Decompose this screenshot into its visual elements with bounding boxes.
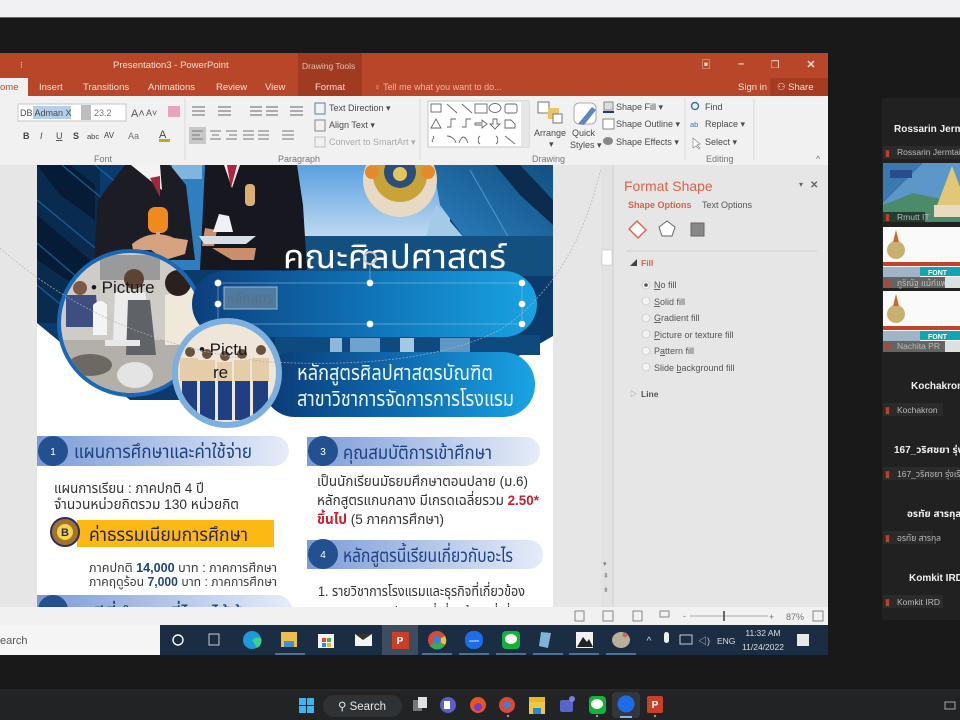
font group: Aa <box>128 131 139 141</box>
font group: 23.2 <box>94 108 112 118</box>
editing group <box>690 98 821 164</box>
ribbon tabs <box>0 78 828 96</box>
fill options: Picture or texture fill <box>654 330 734 340</box>
format shape pane: Shape Options <box>628 200 692 210</box>
format shape pane <box>613 165 828 607</box>
tuition fees: ภาคฤดูร้อน 7,000 บาท : ภาคการศึกษา <box>89 575 277 589</box>
section 4 heading: 4 <box>320 550 326 561</box>
participant: Komkit: ▮ <box>885 597 890 607</box>
windows 10 taskbar: ENG <box>717 636 735 646</box>
university seal <box>363 165 437 217</box>
study plan text <box>54 482 238 509</box>
PowerPoint title bar: ❐ <box>771 60 780 71</box>
ribbon tabs: Format <box>315 82 345 93</box>
font group: A˅ <box>146 108 157 118</box>
participant: Nachita PR <box>883 291 960 352</box>
ribbon tabs: Review <box>216 82 247 93</box>
section 3 heading: คุณสมบัติการเข้าศึกษา <box>343 441 492 464</box>
font group: A <box>159 129 167 141</box>
format shape pane: Format Shape <box>624 178 713 194</box>
format shape pane: Fill <box>641 258 653 268</box>
drawing group: Shape Outline ▾ <box>616 119 681 129</box>
windows 10 search box: earch <box>0 635 28 647</box>
participant: Kochakron: ▮ <box>885 405 890 415</box>
course list: 1. รายวิชาการโรงแรมและธุรกิจที่เกี่ยวข้อง <box>318 581 525 600</box>
drawing group: Styles ▾ <box>570 140 602 150</box>
format shape pane: Text Options <box>702 200 753 210</box>
ribbon tabs: Animations <box>148 82 195 93</box>
ribbon <box>0 96 828 165</box>
participant: Nachita PR: Nachita PR <box>897 341 940 351</box>
course list <box>318 582 524 607</box>
windows 10 taskbar: P <box>397 636 404 647</box>
PowerPoint title bar: Drawing Tools <box>302 61 355 71</box>
course name pill <box>192 271 537 337</box>
participant: Rmutt IT: ▮ <box>885 212 890 222</box>
fill options: Slide background fill <box>654 363 735 373</box>
participant: Rossarin: ▮ <box>885 148 890 158</box>
faculty title: คณะศิลปศาสตร์ <box>283 238 508 275</box>
PowerPoint title bar: Presentation3 - PowerPoint <box>113 60 229 71</box>
entry requirements text: เป็นนักเรียนมัธยมศึกษาตอนปลาย (ม.6) <box>317 473 528 489</box>
participant: ภูริณัฐ: ▮ <box>885 278 890 288</box>
font group: S <box>73 131 79 141</box>
status bar <box>0 607 828 625</box>
participant: Rossarin <box>883 124 960 159</box>
windows 10 taskbar: 11:32 AM <box>745 628 781 638</box>
format shape pane: ◢ <box>630 259 637 267</box>
paragraph group: Paragraph <box>278 154 320 164</box>
tuition banner: B <box>61 527 69 539</box>
fill options <box>642 280 735 373</box>
windows 11 taskbar: P <box>652 700 659 711</box>
placeholder label: Pictu re: re <box>213 363 228 382</box>
font group: Font <box>94 154 113 164</box>
tuition fees <box>89 561 277 589</box>
font group: B <box>23 131 30 141</box>
ribbon tabs: ♀ Tell me what you want to do... <box>374 82 502 92</box>
participant: Komkit <box>883 573 960 608</box>
study plan text: จำนวนหน่วยกิตรวม 130 หน่วยกิต <box>54 496 239 512</box>
font group: A˄ <box>131 108 145 120</box>
section 2 heading (cut off) <box>37 595 292 607</box>
fill options: Solid fill <box>654 297 685 307</box>
slide <box>37 143 553 625</box>
participant: อรทัย: อรทัย สารกุล <box>907 508 960 520</box>
status bar: - <box>683 611 686 621</box>
participant: อรทัย <box>883 508 960 544</box>
drawing group: Quick <box>572 128 596 138</box>
section 4 heading <box>307 539 543 569</box>
ribbon tabs: Insert <box>39 82 63 93</box>
kitchen photo circle <box>57 249 207 400</box>
tuition banner: ค่าธรรมเนียมการศึกษา <box>89 523 248 546</box>
tuition banner <box>51 518 274 547</box>
windows 10 taskbar <box>160 625 828 655</box>
PowerPoint title bar: ✕ <box>806 59 816 71</box>
drawing group: Shape Effects ▾ <box>616 137 679 147</box>
editing group: Editing <box>706 154 734 164</box>
fill options: No fill <box>654 280 677 290</box>
effects icon <box>659 221 675 236</box>
editing group: Select ▾ <box>705 137 738 147</box>
selected text box <box>215 252 525 327</box>
vertical scrollbar: ⇟ <box>603 586 609 594</box>
participant: ภูริณัฐ <box>883 227 960 289</box>
drawing group: Arrange <box>534 128 566 138</box>
PowerPoint title bar: – <box>738 58 744 70</box>
section 3 heading <box>307 436 540 466</box>
participant: Kochakron <box>883 381 960 416</box>
windows 10 taskbar: zoom <box>469 638 480 643</box>
section 2 heading (cut off): มีที่ทำงานที่ไหนได้บ้าง <box>92 600 262 625</box>
fill options: Gradient fill <box>654 313 700 323</box>
PowerPoint title bar <box>0 53 828 96</box>
font group: abc <box>87 132 99 141</box>
editing group: ^ <box>816 154 821 164</box>
vertical scrollbar: ⇞ <box>603 572 609 580</box>
participant: Nachita PR: ▮ <box>885 341 890 351</box>
ribbon tabs: ome <box>0 82 18 93</box>
fill options: Pattern fill <box>654 346 694 356</box>
paragraph group: Text Direction ▾ <box>329 103 391 113</box>
editing group: Find <box>705 102 723 112</box>
ribbon tabs: Sign in <box>738 82 767 93</box>
participant: อรทัย: ▮ <box>885 533 890 543</box>
programme pill <box>263 352 535 417</box>
ribbon tabs: View <box>265 82 286 93</box>
participants panel <box>882 98 960 620</box>
top browser band <box>0 0 960 18</box>
font group: I <box>40 131 43 141</box>
font group <box>18 98 185 164</box>
vertical scrollbar <box>601 165 613 607</box>
paragraph group: Align Text ▾ <box>329 120 375 130</box>
windows 11 taskbar <box>0 690 960 720</box>
vertical scrollbar: ▾ <box>603 561 607 568</box>
programme text: สาขาวิชาการจัดการการโรงแรม <box>297 388 514 411</box>
participant: 167 <box>883 443 960 480</box>
status bar: + <box>769 612 774 622</box>
programme text: หลักสูตรศิลปศาสตรบัณฑิต <box>297 362 493 386</box>
format shape pane: ▷ <box>630 390 637 398</box>
course list: 2. รายวิชาการจัดการที่เกี่ยวข้อง ที่เกี่ยว <box>318 602 525 620</box>
format shape pane: ✕ <box>810 180 818 191</box>
drawing group: Shape Fill ▾ <box>616 102 664 112</box>
slide editing area <box>0 165 828 607</box>
PowerPoint title bar: ⁝ <box>20 60 23 70</box>
participant: Nachita PR: FONT <box>928 334 948 341</box>
participant: ภูริณัฐ: ภูริณัฐ แม้ก์แพร์ <box>897 278 951 289</box>
windows 10 taskbar: ^ <box>647 636 652 647</box>
ribbon tabs: Transitions <box>83 82 129 93</box>
PowerPoint title bar: ▣ <box>701 59 711 71</box>
size icon <box>691 223 704 236</box>
ribbon tabs: ⚇ Share <box>777 82 814 93</box>
fill icon <box>629 221 646 238</box>
staff photo circle <box>172 318 282 428</box>
participant: Rmutt IT <box>883 163 960 223</box>
windows 10 taskbar: 11/24/2022 <box>742 642 784 652</box>
windows 10 taskbar: ◁) <box>698 636 710 646</box>
windows 10 search box <box>0 625 160 655</box>
two staff in suits <box>94 165 307 270</box>
participant: Rmutt IT: Rmutt IT <box>897 212 930 222</box>
section 3 heading: 3 <box>320 447 326 458</box>
paragraph group: Convert to SmartArt ▾ <box>329 137 416 147</box>
placeholder label: Picture: • Picture <box>91 278 155 297</box>
format shape pane: Line <box>641 389 659 399</box>
section 4 heading: หลักสูตรนี้เรียนเกี่ยวกับอะไร <box>343 542 513 568</box>
section 1 heading: แผนการศึกษาและค่าใช้จ่าย <box>74 440 252 463</box>
format shape pane: ▾ <box>799 180 803 189</box>
status bar: 87% <box>786 612 804 622</box>
placeholder label: Pictu re <box>200 343 246 378</box>
entry requirements text <box>317 473 540 527</box>
participant: Komkit: Komkit IRD <box>897 597 940 607</box>
participant: 167: ▮ <box>885 469 890 479</box>
windows 11 taskbar: ⚲ Search <box>338 701 386 713</box>
placeholder label: Pictu re: • Pictu <box>199 340 247 359</box>
entry requirements text: ขึ้นไป (5 ภาคการศึกษา) <box>317 509 444 527</box>
drawing group <box>428 98 685 164</box>
editing group: ab <box>690 120 698 129</box>
participant: Kochakron: Kochakron <box>897 405 938 415</box>
entry requirements text: หลักสูตรแกนกลาง มีเกรดเฉลี่ยรวม 2.50* <box>317 490 540 509</box>
participant: ภูริณัฐ: FONT <box>928 270 948 277</box>
drawing group: ▾ <box>549 139 554 149</box>
paragraph group <box>189 98 420 164</box>
programme text <box>298 363 513 406</box>
font group: U <box>56 131 62 141</box>
section 1 heading <box>37 436 289 466</box>
study plan text: แผนการเรียน : ภาคปกติ 4 ปี <box>54 480 204 496</box>
font group: AV <box>104 131 115 140</box>
selected text box: หลักสูตร <box>227 290 273 307</box>
section 1 heading: 1 <box>50 447 56 458</box>
font group: DB Adman X <box>20 108 72 118</box>
rotation guide arc <box>0 168 601 363</box>
header photo <box>37 165 553 400</box>
tuition fees: ภาคปกติ 14,000 บาท : ภาคการศึกษา <box>89 561 277 575</box>
participant: อรทัย: อรทัย สารกุล <box>897 533 941 543</box>
editing group: Replace ▾ <box>705 119 746 129</box>
drawing group: Drawing <box>532 154 565 164</box>
